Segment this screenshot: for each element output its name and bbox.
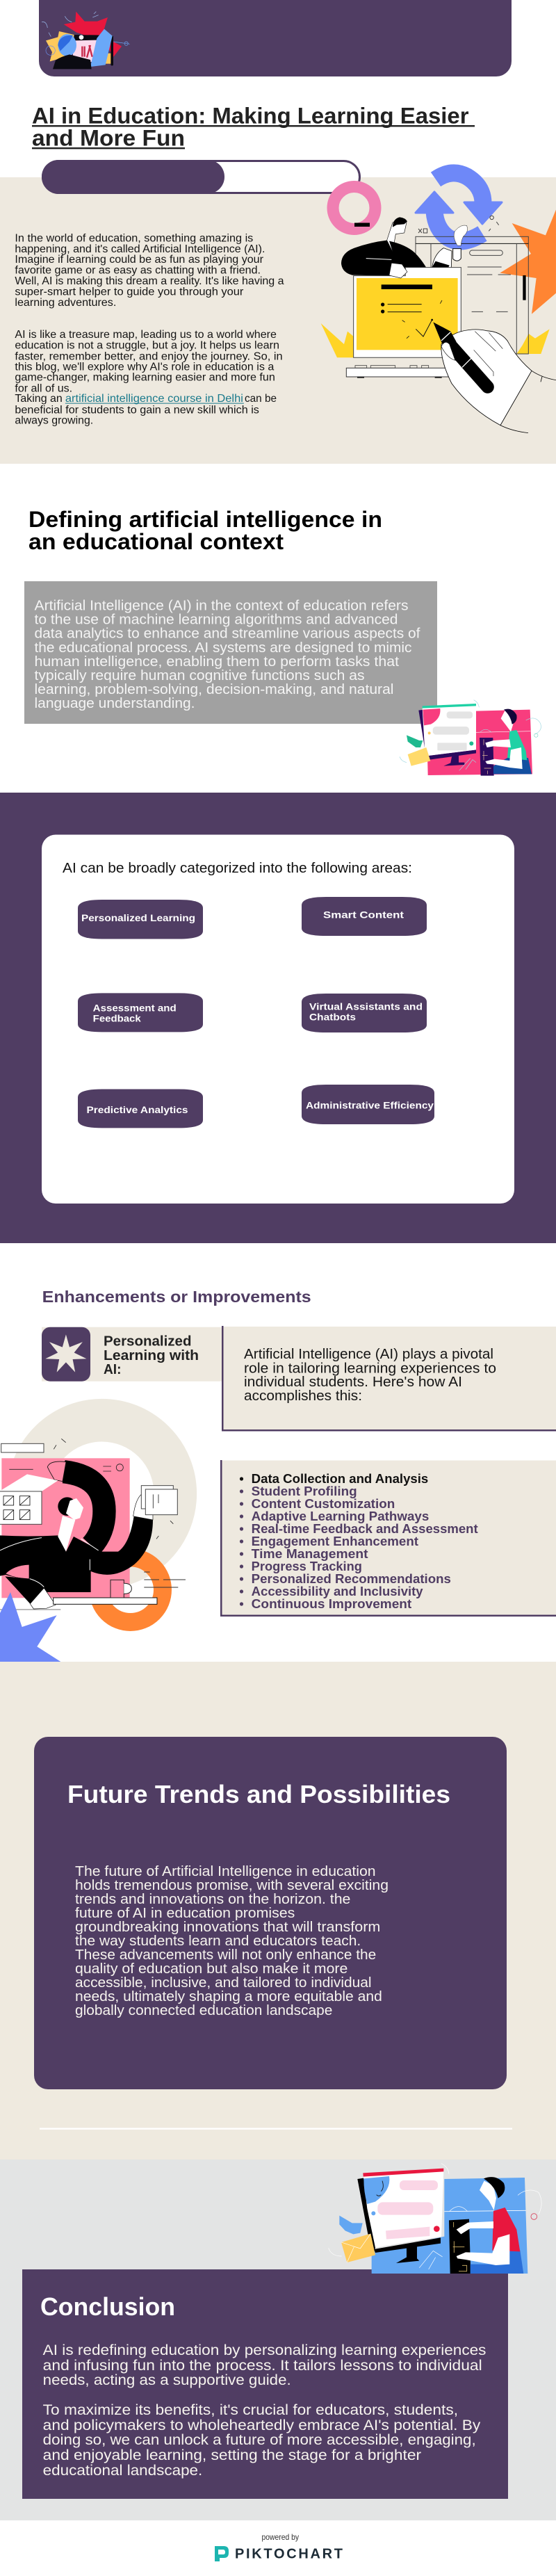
- text block: introduction: learning adventures.: [15, 297, 116, 309]
- text block: introduction: artificial intelligence course in Delhi: [65, 393, 243, 405]
- panel: definition text: Artificial Intelligence (AI) in the context of education refers: [35, 599, 409, 614]
- heading: defining AI: Defining artificial intelligence in: [28, 507, 382, 532]
- panel: list of AI accomplishments: [220, 1460, 556, 1617]
- text block: future trends: holds tremendous promise, with several exciting: [75, 1878, 389, 1893]
- category: assessment and feedback: Assessment and: [93, 1003, 177, 1014]
- text block: conclusion: and enjoyable learning, setting the stage for a brighter: [43, 2447, 421, 2463]
- footer: powered by: [215, 2532, 343, 2561]
- heading: future trends: Future Trends and Possibilities: [67, 1780, 450, 1808]
- panel: personalized learning description: [222, 1326, 556, 1431]
- text block: conclusion: and infusing fun into the process. It tailors lessons to individual: [43, 2358, 482, 2374]
- category: assessment and feedback: Feedback: [93, 1012, 141, 1023]
- text block: introduction: always growing.: [15, 415, 93, 427]
- panel: personalized learning label: [42, 1327, 222, 1382]
- panel: personalized learning description: individual students. Here's how AI: [244, 1375, 462, 1390]
- heading: defining AI: [28, 507, 382, 554]
- panel: list of AI accomplishments: Personalized Recommendations: [252, 1572, 451, 1586]
- panel: list of AI accomplishments: Time Management: [252, 1547, 368, 1561]
- title: and More Fun: [32, 125, 185, 150]
- title: AI in Education: Making Learning Easier: [32, 103, 468, 128]
- text block: future trends: accessible, inclusive, and tailored to individual: [75, 1975, 371, 1991]
- panel: definition text: language understanding.: [35, 696, 195, 711]
- icon: pink ring: [333, 186, 375, 229]
- panel: intro cream background: [0, 177, 556, 464]
- text block: introduction: can be: [245, 393, 277, 405]
- text block: introduction: happening, and it's called Artificial Intelligence (AI).: [15, 243, 265, 255]
- panel: conclusion: [22, 2269, 508, 2499]
- panel: definition text: [24, 581, 437, 724]
- panel: list of AI accomplishments: Continuous Improvement: [252, 1597, 411, 1611]
- panel: list of AI accomplishments: Real-time Feedback and Assessment: [252, 1522, 478, 1536]
- category: virtual assistants: Chatbots: [309, 1011, 356, 1022]
- text block: introduction: for all of us.: [15, 382, 72, 394]
- heading: conclusion: Conclusion: [40, 2292, 175, 2321]
- text block: conclusion: needs, acting as a supportive guide.: [43, 2372, 291, 2388]
- panel: list of AI accomplishments: Engagement Enhancement: [252, 1534, 418, 1548]
- text block: introduction: super-smart helper to guide you through your: [15, 286, 244, 298]
- category: smart content: Smart Content: [323, 909, 404, 921]
- icon: star tile: [42, 1327, 90, 1382]
- title: [32, 103, 475, 150]
- text block: introduction: this blog, we'll explore why AI's role in education is a: [15, 361, 275, 373]
- text block: introduction: favorite game or as easy as chatting with a friend.: [15, 264, 261, 276]
- panel: personalized learning label: Learning with: [104, 1348, 199, 1363]
- category: personalized learning: Personalized Learning: [81, 912, 195, 923]
- category: predictive analytics: Predictive Analytics: [86, 1104, 188, 1115]
- text block: future trends: globally connected education landscape: [75, 2003, 332, 2018]
- category: predictive analytics: [78, 1089, 203, 1128]
- icon: header illustration: [42, 12, 130, 69]
- hero illustration: person, monitor and hand with pen: [321, 210, 556, 433]
- category: virtual assistants: Virtual Assistants and: [309, 1001, 423, 1012]
- illustration: blue chat screen: [329, 2164, 541, 2274]
- text block: conclusion: and policymakers to wholeheartedly embrace AI's potential. By: [43, 2417, 481, 2433]
- text block: future trends: needs, ultimately shaping a more equitable and: [75, 1989, 382, 2004]
- text block: introduction: Well, AI is making this dream a reality. It's like having a: [15, 275, 284, 287]
- panel: list of AI accomplishments: Progress Tracking: [252, 1560, 362, 1573]
- panel: conclusion background: [0, 2160, 556, 2520]
- panel: definition text: typically require human cognitive functions such as: [35, 668, 364, 683]
- text block: introduction: beneficial for students to gain a new skill which is: [15, 404, 259, 416]
- panel: personalized learning label: Personalized: [104, 1334, 192, 1350]
- header bar: [39, 0, 512, 76]
- panel: list of AI accomplishments: Accessibility and Inclusivity: [252, 1585, 423, 1598]
- category: administrative efficiency: [302, 1085, 434, 1124]
- footer: powered by: powered by: [261, 2532, 299, 2542]
- text block: future trends: trends and innovations on the horizon. the: [75, 1892, 350, 1907]
- footer: powered by: PIKTOCHART: [235, 2546, 343, 2561]
- text block: introduction: education is not a struggle, but a joy. It helps us learn: [15, 340, 279, 352]
- text block: conclusion: AI is redefining education by personalizing learning experiences: [43, 2342, 486, 2358]
- category: administrative efficiency: Administrative Efficiency: [306, 1100, 434, 1111]
- panel: personalized learning description: Artificial Intelligence (AI) plays a pivotal: [244, 1347, 493, 1362]
- panel: personalized learning description: accomplishes this:: [244, 1388, 362, 1404]
- categories intro text: AI can be broadly categorized into the following areas:: [63, 861, 412, 876]
- text block: future trends: groundbreaking innovations that will transform: [75, 1920, 380, 1935]
- text block: conclusion: educational landscape.: [43, 2463, 202, 2479]
- heading: enhancements: Enhancements or Improvements: [42, 1288, 311, 1306]
- text block: introduction: game-changer, making learning easier and more fun: [15, 371, 275, 384]
- text block: introduction: faster, remember better, and enjoy the journey. So, in: [15, 350, 283, 362]
- text block: introduction: Imagine if learning could be as fun as playing your: [15, 254, 264, 266]
- panel: list of AI accomplishments: Data Collection and Analysis: [252, 1472, 428, 1486]
- icon: piktochart logo: [215, 2546, 229, 2561]
- panel: AI categories section: [0, 793, 556, 1243]
- category: assessment and feedback: [78, 993, 203, 1032]
- text block: conclusion: [43, 2342, 486, 2479]
- panel: list of AI accomplishments: Student Profiling: [252, 1484, 357, 1498]
- panel: personalized learning description: role in tailoring learning experiences to: [244, 1361, 496, 1376]
- category: personalized learning: [78, 900, 203, 939]
- panel: definition text: to the use of machine learning algorithms and advanced: [35, 613, 398, 628]
- panel: definition text: data analytics to enhance and streamline various aspects of: [35, 626, 420, 642]
- text block: future trends: [75, 1864, 389, 2018]
- panel: personalized learning label: AI:: [104, 1362, 121, 1377]
- text block: future trends: future of AI in education promises: [75, 1906, 295, 1921]
- text block: introduction: [15, 232, 284, 427]
- text block: introduction: AI is like a treasure map, leading us to a world where: [15, 329, 277, 341]
- illustration: pink chat screen: [400, 700, 541, 776]
- panel: future trends background: [0, 1662, 556, 2160]
- text block: conclusion: To maximize its benefits, it's crucial for educators, students,: [43, 2402, 458, 2418]
- category: smart content: [302, 897, 427, 936]
- panel: list of AI accomplishments: Adaptive Learning Pathways: [252, 1509, 429, 1523]
- panel: definition text: human intelligence, enabling them to perform tasks that: [35, 654, 399, 670]
- category: virtual assistants: [302, 994, 427, 1032]
- text block: introduction: In the world of education, something amazing is: [15, 232, 253, 244]
- text block: introduction: Taking an: [15, 393, 63, 405]
- heading: defining AI: an educational context: [28, 529, 284, 554]
- panel: list of AI accomplishments: Content Customization: [252, 1497, 395, 1511]
- text block: conclusion: doing so, we can unlock a future of more accessible, engaging,: [43, 2432, 476, 2448]
- icon: blue refresh arrows: [416, 173, 502, 241]
- illustration: person with house: [0, 1420, 186, 1662]
- panel: definition text: learning, problem-solving, decision-making, and natural: [35, 682, 393, 697]
- text block: future trends: These advancements will not only enhance the: [75, 1947, 376, 1963]
- panel: future trends card: [34, 1737, 507, 2089]
- text block: future trends: the way students learn and educators teach.: [75, 1934, 361, 1949]
- panel: definition text: the educational process. AI systems are designed to mimic: [35, 640, 411, 656]
- text block: future trends: The future of Artificial Intelligence in education: [75, 1864, 376, 1879]
- text block: future trends: quality of education but also make it more: [75, 1961, 348, 1977]
- decorative progress pill: [42, 160, 360, 193]
